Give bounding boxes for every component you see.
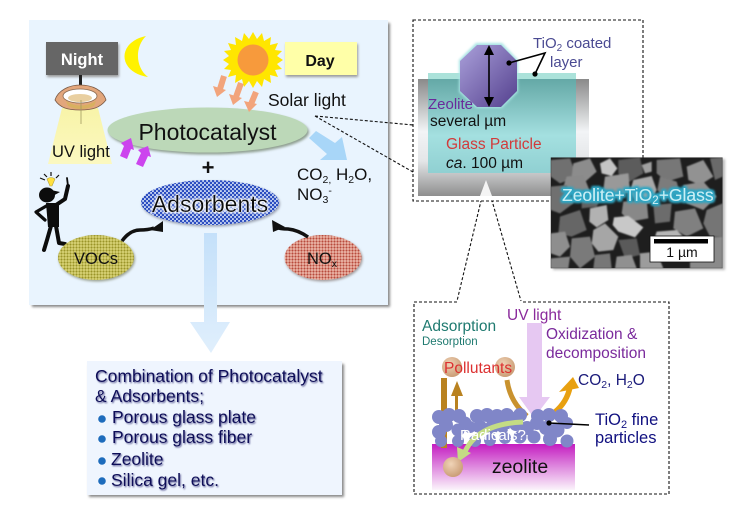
arrow: to combination box <box>190 233 230 353</box>
panel: combination of photocatalyst and adsorbents: Zeolite <box>111 449 164 469</box>
panel: surface reaction detail <box>414 302 669 494</box>
text: TiO2 fine particles: particles <box>595 429 656 447</box>
text: products: H <box>331 165 348 184</box>
panel: combination of photocatalyst and adsorbents: Combination of Photocatalyst <box>95 366 323 386</box>
ellipse: photocatalyst <box>108 108 309 154</box>
text: adsorption desorption: Adsorption <box>422 318 496 335</box>
double arrow: several micrometres <box>484 45 494 107</box>
text: radicals: Radicals? <box>460 427 526 444</box>
text: CO2 H2O: , H <box>607 372 627 389</box>
zeolite block <box>432 444 575 490</box>
ellipse: VOCs: VOCs <box>74 250 118 268</box>
ellipse: VOCs <box>58 235 135 282</box>
arrow: VOCs to adsorbents <box>122 221 163 241</box>
glass particle <box>418 79 589 196</box>
panel: photocatalyst overview <box>29 20 390 307</box>
leader lines: coated layer <box>506 53 545 77</box>
text: products: O, <box>354 165 372 184</box>
icon: sun <box>223 32 283 88</box>
panel: glass particle cross-section <box>413 20 643 201</box>
light beam <box>48 108 112 164</box>
green radical arrow <box>457 422 523 462</box>
curved adsorption arrow <box>507 380 527 416</box>
text: products: 3 <box>322 194 328 206</box>
text: zeolite size: several µm <box>430 113 506 130</box>
text: products: 2 <box>348 174 354 186</box>
text: CO2 H2O: 2 <box>601 379 607 391</box>
leader: TiO2 fine particles <box>546 420 589 426</box>
ellipse: adsorbents: Adsorbents <box>152 191 268 217</box>
arrow: UV light <box>519 323 550 418</box>
arrow: CO2 H2O release <box>555 377 579 412</box>
panel: combination of photocatalyst and adsorbents: Porous glass fiber <box>112 427 252 447</box>
icon: moon <box>124 36 148 77</box>
text: pollutants: Pollutants <box>444 360 512 377</box>
panel: combination of photocatalyst and adsorbents: Silica gel, etc. <box>111 470 219 490</box>
bullets <box>98 415 106 485</box>
text: TiO2 fine particles: fine <box>627 411 658 429</box>
text: TiO2 coated layer <box>533 35 611 71</box>
text: zeolite size: Glass Particle <box>446 136 542 153</box>
label: night: Night <box>61 51 104 69</box>
text: TiO2 fine particles: TiO <box>595 411 621 429</box>
text: TiO2 coated layer: 2 <box>557 43 563 54</box>
SEM caption: 2 <box>652 195 659 207</box>
panel: combination of photocatalyst and adsorbents: Porous glass plate <box>112 407 256 427</box>
arrow: products <box>309 131 347 160</box>
text: TiO2 coated layer: TiO <box>533 35 557 52</box>
ellipse: NOx <box>284 235 362 282</box>
label: night <box>46 42 119 77</box>
icon: person with idea <box>36 172 68 250</box>
ellipse: photocatalyst: Photocatalyst <box>138 119 277 145</box>
text: TiO2 coated layer: coated <box>562 35 611 52</box>
pollutant balls <box>442 357 515 477</box>
text: UV light: UV light <box>52 143 110 161</box>
text: products: CO <box>297 165 322 184</box>
label: day <box>285 42 358 77</box>
callout lines <box>315 116 521 301</box>
panel: combination of photocatalyst and adsorbents <box>87 361 344 497</box>
arrows: solar light <box>213 76 257 112</box>
text: CO2 H2O: 2 <box>627 379 633 391</box>
scale bar: 1 µm <box>666 244 698 260</box>
arrows: UV light purple <box>120 138 151 167</box>
SEM caption: Zeolite+TiO <box>562 185 652 205</box>
text: adsorption desorption: Desorption <box>422 336 478 348</box>
text: CO2 H2O: O <box>633 372 645 389</box>
SEM micrograph <box>551 157 725 270</box>
text: oxidization: decomposition <box>546 345 646 362</box>
text: products <box>297 165 372 206</box>
text: zeolite size <box>428 96 542 172</box>
text: UV light: UV light <box>507 307 562 324</box>
arrow: NOx to adsorbents <box>272 220 308 237</box>
text: adsorption desorption <box>422 318 496 348</box>
icon: UV lamp <box>55 75 106 124</box>
zeolite crystal <box>459 43 518 108</box>
panel: combination of photocatalyst and adsorbents: & Adsorbents; <box>95 386 204 406</box>
text: TiO2 fine particles <box>595 411 658 447</box>
zeolite block: zeolite <box>492 456 548 478</box>
text: products: 2, <box>322 174 331 186</box>
text: CO2 H2O: CO <box>578 372 601 389</box>
label: day: Day <box>305 53 335 70</box>
ellipse: NOx: x <box>332 258 338 270</box>
text: TiO2 fine particles: 2 <box>621 419 627 431</box>
text: products: - <box>328 185 332 197</box>
text: oxidization: Oxidization & <box>546 326 638 343</box>
desorption bar and arrow <box>441 378 463 448</box>
scale bar <box>650 236 714 262</box>
ellipse: adsorbents <box>141 180 280 226</box>
text: solar light: Solar light <box>268 90 346 110</box>
text: TiO2 coated layer: layer <box>550 54 583 71</box>
ellipse: NOx: NO <box>307 250 332 268</box>
text: oxidization <box>546 326 646 362</box>
TiO2 fine particles <box>432 408 574 448</box>
text: zeolite size: ca. 100 µm <box>446 155 523 172</box>
text: zeolite size: Zeolite <box>428 96 473 113</box>
SEM caption: +Glass <box>659 185 714 205</box>
plus sign: + <box>202 155 214 180</box>
text: products: NO <box>297 185 322 204</box>
